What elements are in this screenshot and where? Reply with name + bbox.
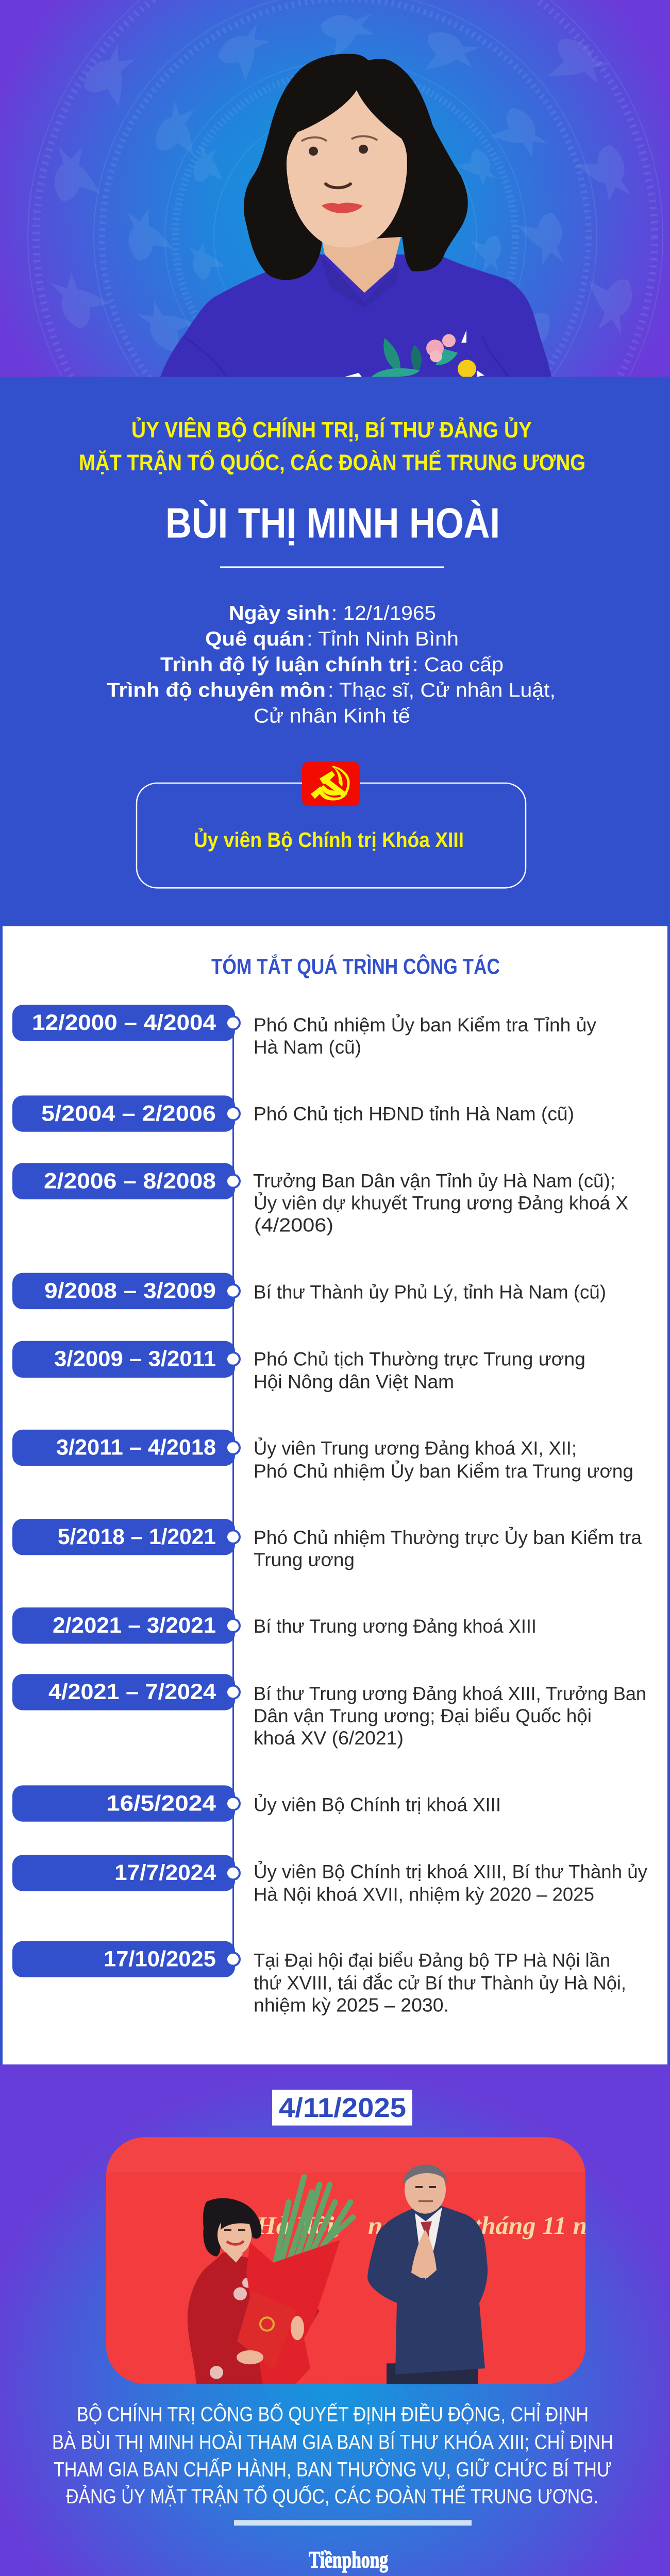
entry: 3/2009 – 3/2011 — [12, 1341, 585, 1393]
entry: 2/2006 – 8/2008 — [12, 1163, 628, 1235]
entry: 4/2021 – 7/2024: Dân vận Trung ương; Đại biểu Quốc hội — [254, 1705, 592, 1726]
personal details: : Thạc sĩ, Cử nhân Luật, — [328, 679, 556, 702]
entry: 2/2006 – 8/2008: (4/2006) — [254, 1214, 333, 1235]
entry: 2/2006 – 8/2008: 2/2006 – 8/2008 — [44, 1169, 216, 1193]
position heading: ỦY VIÊN BỘ CHÍNH TRỊ, BÍ THƯ ĐẢNG ỦY — [131, 416, 532, 443]
personal details — [107, 602, 556, 727]
personal details: Trình độ chuyên môn — [107, 679, 326, 702]
face — [287, 90, 407, 247]
personal details: : Tỉnh Ninh Bình — [307, 628, 459, 650]
entry: 5/2004 – 2/2006: Phó Chủ tịch HĐND tỉnh Hà Nam (cũ) — [254, 1103, 574, 1124]
embroidery flowers — [344, 330, 484, 378]
hero gradient background — [0, 0, 670, 377]
entry: 3/2009 – 3/2011: Hội Nông dân Việt Nam — [254, 1371, 454, 1393]
photo: handover ceremony — [106, 2137, 620, 2386]
collar — [319, 252, 399, 309]
entry: 17/10/2025: 17/10/2025 — [104, 1947, 216, 1971]
hero portrait section — [0, 0, 670, 377]
personal details: Cử nhân Kinh tế — [254, 705, 410, 727]
entry: 17/10/2025: nhiệm kỳ 2025 – 2030. — [254, 1994, 449, 2015]
portrait of Bùi Thị Minh Hoài — [160, 54, 551, 378]
personal details: Ngày sinh — [229, 602, 330, 624]
entry: 3/2011 – 4/2018: Phó Chủ nhiệm Ủy ban Kiểm tra Trung ương — [254, 1460, 633, 1482]
entry: 17/7/2024 — [12, 1855, 647, 1905]
personal details: : Cao cấp — [412, 653, 504, 676]
backdrop lettering: ngày 4 — [368, 2211, 439, 2240]
entry: 9/2008 – 3/2009: 9/2008 – 3/2009 — [44, 1279, 216, 1303]
entry: 3/2009 – 3/2011: 3/2009 – 3/2011 — [54, 1347, 216, 1371]
person name: BÙI THỊ MINH HOÀI — [165, 499, 500, 547]
entry: 3/2011 – 4/2018: Ủy viên Trung ương Đảng khoá XI, XII; — [254, 1437, 577, 1459]
panel: career timeline — [3, 926, 667, 2064]
entry: 16/5/2024: Ủy viên Bộ Chính trị khoá XIII — [254, 1794, 501, 1815]
entry: 2/2021 – 3/2021: Bí thư Trung ương Đảng khoá XIII — [254, 1615, 537, 1637]
entry: 17/10/2025: thứ XVIII, tái đắc cử Bí thư Thành ủy Hà Nội, — [254, 1972, 626, 1993]
neck — [322, 237, 401, 293]
entry: 5/2018 – 1/2021 — [12, 1519, 642, 1570]
panel: latest appointment — [0, 2064, 670, 2576]
timeline axis — [232, 1023, 234, 1959]
eyes and brows — [301, 136, 377, 156]
entry: 9/2008 – 3/2009 — [12, 1273, 606, 1309]
entry: 5/2004 – 2/2006: 5/2004 – 2/2006 — [41, 1101, 216, 1126]
position heading — [79, 416, 585, 475]
entry: 4/2021 – 7/2024: khoá XV (6/2021) — [254, 1727, 404, 1749]
entry: 12/2000 – 4/2004 — [12, 1005, 596, 1058]
entry: 17/7/2024: Hà Nội khoá XVII, nhiệm kỳ 2020 – 2025 — [254, 1884, 594, 1905]
hair — [244, 54, 468, 280]
entry: 3/2009 – 3/2011: Phó Chủ tịch Thường trực Trung ương — [254, 1348, 585, 1370]
entry: 2/2006 – 8/2008: Ủy viên dự khuyết Trung ương Đảng khoá X — [254, 1192, 628, 1213]
entry: 5/2004 – 2/2006 — [12, 1095, 574, 1132]
entry: 12/2000 – 4/2004: Hà Nam (cũ) — [254, 1037, 361, 1058]
date label: 4/11/2025 — [279, 2093, 406, 2123]
ao dai dress — [160, 255, 551, 377]
timeline heading: TÓM TẮT QUÁ TRÌNH CÔNG TÁC — [211, 953, 500, 979]
entry: 17/7/2024: Ủy viên Bộ Chính trị khoá XIII, Bí thư Thành ủy — [254, 1861, 647, 1882]
entry: 2/2021 – 3/2021: 2/2021 – 3/2021 — [53, 1613, 216, 1638]
logo: Tiền Phong: Tiềnphong — [309, 2547, 388, 2572]
entry: 2/2021 – 3/2021 — [12, 1607, 537, 1644]
backdrop lettering: tháng 11 năm — [474, 2211, 620, 2240]
divider under name — [220, 566, 444, 568]
closing bar — [234, 2520, 472, 2526]
man in navy suit — [367, 2164, 488, 2386]
entry: 4/2021 – 7/2024: Bí thư Trung ương Đảng khoá XIII, Trưởng Ban — [254, 1683, 646, 1704]
personal details: Quê quán — [205, 628, 305, 650]
nose — [326, 184, 350, 188]
personal details: Trình độ lý luận chính trị — [160, 653, 410, 676]
bronze drum pattern — [27, 0, 663, 377]
flower bouquet — [246, 2177, 353, 2386]
entry: 16/5/2024: 16/5/2024 — [106, 1791, 216, 1816]
entry: 5/2018 – 1/2021: Phó Chủ nhiệm Thường trực Ủy ban Kiểm tra — [254, 1527, 642, 1548]
backdrop lettering: Hà Nội, — [256, 2211, 341, 2240]
appointment description — [52, 2402, 613, 2508]
entry: 3/2011 – 4/2018: 3/2011 – 4/2018 — [56, 1435, 216, 1460]
icon: party emblem — [302, 761, 360, 806]
entry: 2/2006 – 8/2008: Trưởng Ban Dân vận Tỉnh ủy Hà Nam (cũ); — [253, 1170, 615, 1191]
entry: 4/2021 – 7/2024: 4/2021 – 7/2024 — [48, 1680, 216, 1704]
entry: 16/5/2024 — [12, 1785, 501, 1822]
entry: 4/2021 – 7/2024 — [12, 1674, 646, 1749]
entry: 3/2011 – 4/2018 — [12, 1430, 633, 1482]
entry: 9/2008 – 3/2009: Bí thư Thành ủy Phủ Lý, tỉnh Hà Nam (cũ) — [254, 1281, 606, 1302]
position heading: MẶT TRẬN TỔ QUỐC, CÁC ĐOÀN THỂ TRUNG ƯƠNG — [79, 449, 585, 475]
lips — [322, 202, 363, 213]
header panel: blue profile block — [0, 377, 670, 931]
woman in red ao dai — [188, 2198, 320, 2386]
entry: 17/7/2024: 17/7/2024 — [114, 1861, 216, 1885]
red decision folder — [237, 2290, 304, 2369]
membership text: Ủy viên Bộ Chính trị Khóa XIII — [194, 828, 464, 852]
entry: 12/2000 – 4/2004: Phó Chủ nhiệm Ủy ban Kiểm tra Tỉnh ủy — [254, 1014, 596, 1036]
entry: 17/10/2025: Tại Đại hội đại biểu Đảng bộ TP Hà Nội lần — [254, 1950, 610, 1971]
entry: 12/2000 – 4/2004: 12/2000 – 4/2004 — [32, 1011, 216, 1035]
membership callout box — [137, 783, 526, 888]
entry: 5/2018 – 1/2021: Trung ương — [254, 1549, 355, 1570]
entry: 17/10/2025 — [12, 1941, 626, 2015]
backdrop lettering — [256, 2211, 620, 2240]
entry: 5/2018 – 1/2021: 5/2018 – 1/2021 — [58, 1524, 216, 1549]
personal details: : 12/1/1965 — [331, 602, 436, 624]
